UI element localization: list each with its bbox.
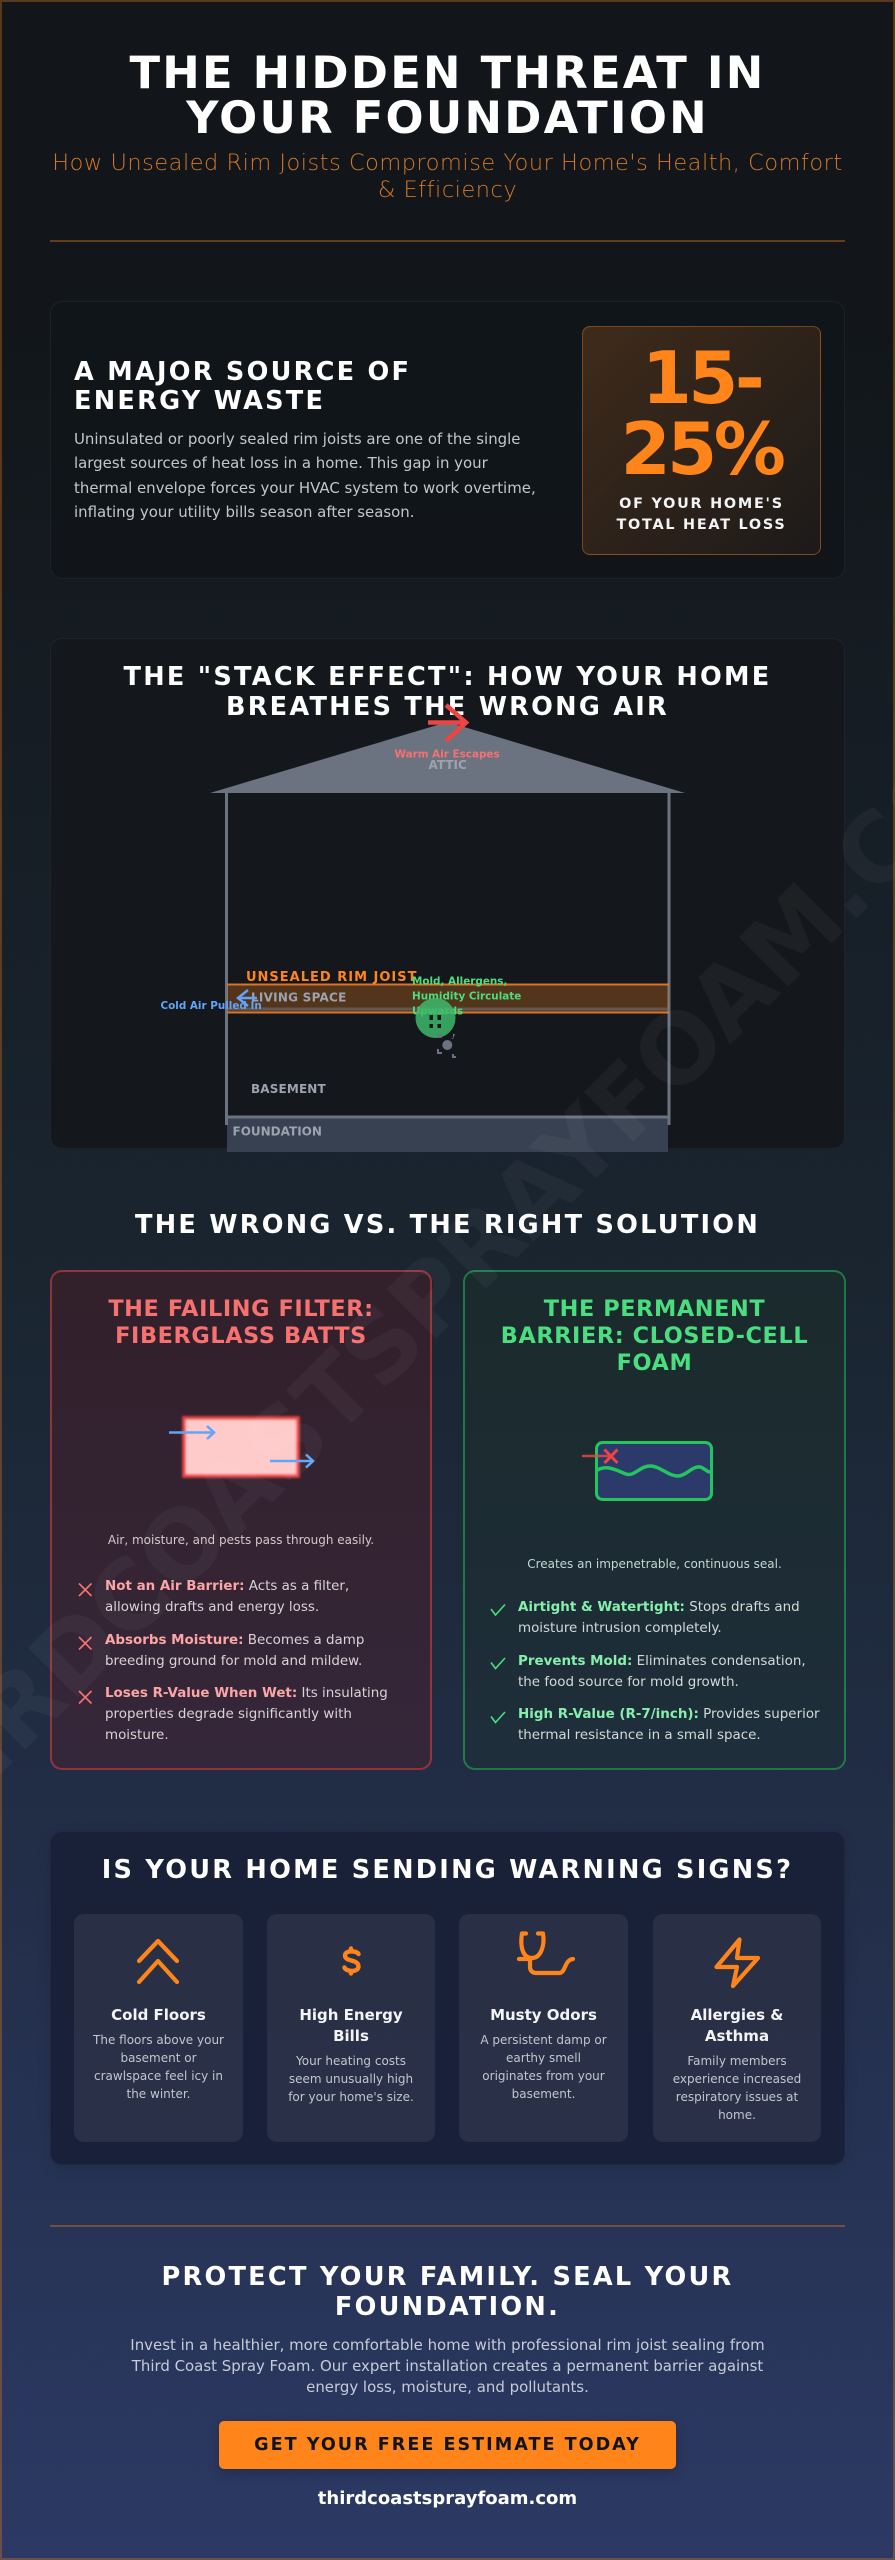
title: high energy bills: Bills <box>333 2027 369 2045</box>
item: prevents mold: Prevents Mold: Eliminates condensation, <box>518 1654 806 1669</box>
text: energy waste description: inflating your utility bills season after season. <box>74 503 415 521</box>
item: prevents mold: the food source for mold growth. <box>518 1675 739 1690</box>
text: call to action: Third Coast Spray Foam. Our expert installation creates a permanent barrier against <box>132 2357 763 2375</box>
text: musty odors <box>480 2033 607 2101</box>
text: high energy bills <box>288 2054 414 2104</box>
stat number: 15- <box>642 336 761 420</box>
heading: major source: A MAJOR SOURCE OF <box>74 357 411 387</box>
panel: energy waste <box>50 301 845 579</box>
heading: major source: ENERGY WASTE <box>74 386 325 416</box>
icon: lightning bolt <box>714 1937 760 1988</box>
caption: fiberglass: Air, moisture, and pests pass through easily. <box>108 1533 374 1547</box>
heading: permanent barrier: FOAM <box>617 1350 692 1376</box>
arrow: warm air <box>428 705 466 741</box>
stat caption: OF YOUR HOME'S <box>619 496 784 512</box>
item: absorbs moisture <box>105 1633 364 1669</box>
heading: wrong vs right: THE WRONG VS. THE RIGHT SOLUTION <box>135 1210 760 1240</box>
item: high r-value: thermal resistance in a small space. <box>518 1728 761 1743</box>
title: high energy bills: High Energy <box>299 2006 403 2024</box>
call to action <box>130 2262 765 2509</box>
panel: fiberglass <box>50 1270 432 1770</box>
text: musty odors: A persistent damp or <box>480 2033 607 2047</box>
text: energy waste description <box>74 430 536 521</box>
heading: permanent barrier: THE PERMANENT <box>544 1296 765 1322</box>
icon: fiberglass batt <box>169 1414 315 1480</box>
item: absorbs moisture: Absorbs Moisture: Becomes a damp <box>105 1633 364 1648</box>
label: mold and allergens: Humidity Circulate <box>412 990 521 1002</box>
panel: stack effect <box>50 638 845 1149</box>
text: call to action: Invest in a healthier, more comfortable home with professional rim joist sealing from <box>130 2336 765 2354</box>
item: not an air barrier <box>105 1579 349 1615</box>
foundation <box>227 1118 668 1152</box>
walls <box>226 793 669 1125</box>
text: cold floors: The floors above your <box>93 2033 224 2047</box>
text: high energy bills: seem unusually high <box>289 2072 413 2086</box>
header <box>52 46 843 203</box>
icon: mold <box>416 998 456 1038</box>
label: basement: BASEMENT <box>251 1082 327 1096</box>
heading: failing filter: THE FAILING FILTER: <box>108 1296 374 1322</box>
panel: closed-cell foam <box>463 1270 846 1770</box>
text: high energy bills: for your home's size. <box>288 2090 414 2104</box>
arrow: cold air <box>238 990 257 1006</box>
roof <box>210 722 685 793</box>
button: free estimate: GET YOUR FREE ESTIMATE TODAY <box>254 2435 641 2455</box>
icon: chevrons <box>136 1938 180 1984</box>
text: call to action: energy loss, moisture, and pollutants. <box>306 2378 589 2396</box>
stat box <box>582 326 821 555</box>
footer divider <box>50 2225 845 2227</box>
icons: x marks <box>78 1582 92 1704</box>
text: cold floors: basement or <box>120 2051 197 2065</box>
item: airtight <box>518 1600 800 1636</box>
title <box>129 46 766 144</box>
text: energy waste description: Uninsulated or poorly sealed rim joists are one of the single <box>74 430 520 448</box>
text: cold floors <box>92 2033 224 2101</box>
title: musty odors: Musty Odors <box>490 2006 597 2024</box>
heading: stack effect <box>124 662 771 722</box>
list: foam benefits <box>518 1600 820 1743</box>
item: loses r-value: Loses R-Value When Wet: Its insulating <box>105 1686 388 1701</box>
text: allergies and asthma <box>673 2054 801 2122</box>
heading: failing filter: FIBERGLASS BATTS <box>115 1323 367 1349</box>
website url: thirdcoastsprayfoam.com <box>318 2488 577 2509</box>
title: allergies and asthma: Allergies & <box>691 2006 783 2024</box>
heading: warning signs: IS YOUR HOME SENDING WARNING SIGNS? <box>102 1855 793 1885</box>
item: loses r-value: moisture. <box>105 1728 169 1743</box>
text: cold floors: crawlspace feel icy in <box>94 2069 223 2083</box>
card: allergies and asthma <box>653 1914 821 2142</box>
item: absorbs moisture: breeding ground for mold and mildew. <box>105 1654 362 1669</box>
item: loses r-value: properties degrade significantly with <box>105 1707 352 1722</box>
stat caption <box>616 496 786 533</box>
card: high energy bills <box>267 1914 435 2142</box>
label: attic: ATTIC <box>428 758 467 772</box>
card: musty odors <box>459 1914 628 2142</box>
text: allergies and asthma: respiratory issues at <box>676 2090 798 2104</box>
stat number <box>621 336 784 491</box>
label: mold and allergens: Mold, Allergens, <box>412 976 507 988</box>
heading: failing filter <box>108 1296 374 1349</box>
item: airtight: Airtight & Watertight: Stops drafts and <box>518 1600 800 1615</box>
text: musty odors: earthy smell <box>506 2051 581 2065</box>
title: allergies and asthma <box>690 2006 783 2045</box>
heading: protect your family <box>162 2262 734 2322</box>
label: mold and allergens: Upwards <box>412 1006 463 1018</box>
item: high r-value: High R-Value (R-7/inch): Provides superior <box>518 1707 820 1722</box>
item: high r-value <box>518 1707 820 1743</box>
caption: foam: Creates an impenetrable, continuous seal. <box>527 1557 782 1571</box>
item: not an air barrier: allowing drafts and energy loss. <box>105 1600 319 1615</box>
item: not an air barrier: Not an Air Barrier: Acts as a filter, <box>105 1579 349 1594</box>
button: free estimate <box>219 2421 676 2469</box>
label: warm air: Warm Air Escapes <box>394 748 500 760</box>
list: fiberglass drawbacks <box>105 1579 388 1743</box>
heading: protect your family: PROTECT YOUR FAMILY. SEAL YOUR <box>162 2262 734 2292</box>
text: energy waste description: thermal envelope forces your HVAC system to work overtime, <box>74 479 536 497</box>
text: energy waste description: largest sources of heat loss in a home. This gap in your <box>74 454 488 472</box>
house diagram <box>160 703 685 1152</box>
text: cold floors: the winter. <box>126 2087 190 2101</box>
text: musty odors: basement. <box>512 2087 575 2101</box>
heading: major source <box>74 357 411 416</box>
rim joist band <box>227 984 669 1012</box>
title: cold floors: Cold Floors <box>111 2006 206 2024</box>
foundation: FOUNDATION <box>232 1124 322 1138</box>
heading: stack effect: THE "STACK EFFECT": HOW YOUR HOME <box>124 662 771 692</box>
stat number: 25% <box>621 407 782 491</box>
label: unsealed rim joist: UNSEALED RIM JOIST <box>246 970 418 985</box>
text: musty odors: originates from your <box>482 2069 605 2083</box>
icon: stethoscope <box>516 1931 576 1976</box>
stat caption: TOTAL HEAT LOSS <box>616 517 786 533</box>
title: high energy bills <box>299 2006 403 2045</box>
text: allergies and asthma: Family members <box>687 2054 787 2068</box>
card: cold floors <box>74 1914 243 2142</box>
text: allergies and asthma: experience increased <box>673 2072 801 2086</box>
item: loses r-value <box>105 1686 388 1743</box>
text: allergies and asthma: home. <box>718 2108 756 2122</box>
item: prevents mold <box>518 1654 806 1690</box>
text: high energy bills: Your heating costs <box>296 2054 406 2068</box>
icon: foam barrier <box>582 1441 713 1501</box>
title: THE HIDDEN THREAT IN <box>129 46 766 99</box>
heading: protect your family: FOUNDATION. <box>335 2292 560 2322</box>
label: living space: LIVING SPACE <box>251 990 347 1004</box>
panel: warning signs <box>50 1831 845 2165</box>
heading: permanent barrier <box>501 1296 808 1376</box>
icons: check marks <box>490 1604 506 1724</box>
subtitle: & Efficiency <box>378 177 517 203</box>
title: allergies and asthma: Asthma <box>705 2027 769 2045</box>
title: YOUR FOUNDATION <box>186 91 709 144</box>
subtitle <box>52 150 843 203</box>
item: airtight: moisture intrusion completely. <box>518 1621 722 1636</box>
text: call to action <box>130 2336 765 2396</box>
header divider <box>50 240 845 242</box>
icon: particles <box>437 1034 456 1058</box>
heading: permanent barrier: BARRIER: CLOSED-CELL <box>501 1323 808 1349</box>
subtitle: How Unsealed Rim Joists Compromise Your Home's Health, Comfort <box>52 150 843 176</box>
icon: dollar <box>342 1946 361 1976</box>
heading: stack effect: BREATHES THE WRONG AIR <box>226 692 669 722</box>
label: cold air: Cold Air Pulled In <box>160 1000 262 1012</box>
